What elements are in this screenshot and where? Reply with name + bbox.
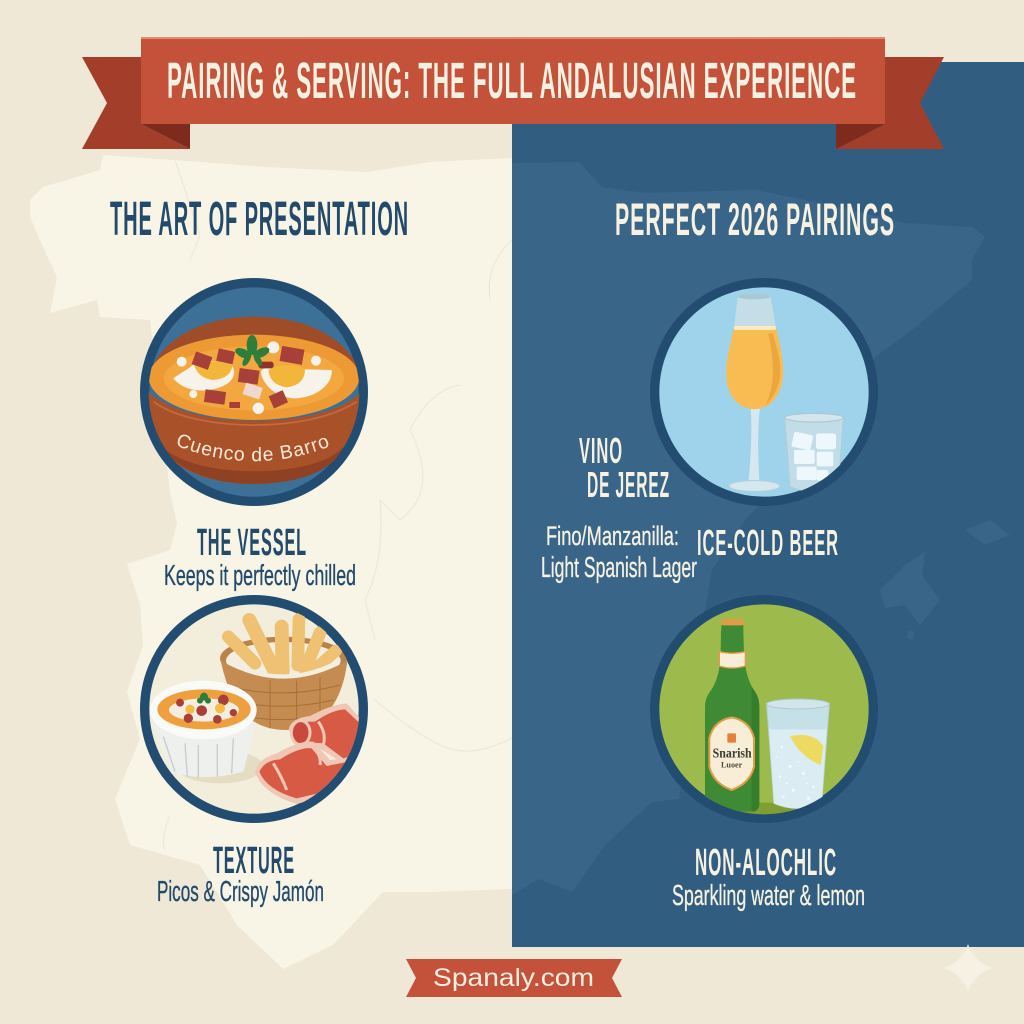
- right map of Spain: [512, 162, 985, 895]
- blue pairings panel: [512, 62, 1024, 947]
- text: vino de jerez: [579, 430, 670, 505]
- caption: fino and lager: [541, 521, 697, 584]
- glass stem and foot: [749, 407, 760, 480]
- text: non-alcoholic: NON-ALOCHLIC: [695, 842, 837, 884]
- second line: Light Spanish Lager: [541, 552, 697, 584]
- illustration: sherry glass and iced tumbler: [655, 283, 873, 501]
- green bottle: [705, 625, 759, 812]
- bowl label text: Cuenco de Barro: [178, 434, 328, 462]
- sparkling water glass: [767, 703, 829, 808]
- left boiled egg: [173, 361, 234, 390]
- basket back: [220, 636, 346, 665]
- bubbles: [776, 745, 815, 800]
- ramekin toppings: [169, 698, 239, 722]
- bowl front: [147, 390, 363, 484]
- illustration: lager bottle and sparkling water: Luoer: [721, 760, 743, 769]
- text: texture: TEXTURE: [213, 840, 295, 882]
- text: the vessel: THE VESSEL: [197, 522, 307, 564]
- wicker basket front: [268, 658, 341, 678]
- text: the vessel: [164, 522, 356, 592]
- soup surface: [149, 335, 359, 420]
- illustration: lager bottle and sparkling water: [655, 600, 873, 818]
- infographic canvas: DE JEREZ: [587, 464, 670, 505]
- right boiled egg: [261, 368, 332, 398]
- sherry liquid: [726, 327, 783, 409]
- illustration: clay bowl of salmorejo: [140, 278, 368, 506]
- illustration: picos, ramekin and jamon: [145, 600, 363, 818]
- left map of Spain: [30, 155, 512, 969]
- table shadow: [734, 802, 798, 814]
- ham cubes: [192, 346, 304, 409]
- bread sticks: [228, 619, 336, 672]
- caption: fino and lager: Fino/Manzanilla:: [546, 521, 679, 551]
- shadow: [182, 754, 261, 784]
- right ribbon tail: [836, 57, 944, 149]
- caption: non-alcoholic: Sparkling water & lemon: [672, 880, 865, 912]
- bottle label text: Snarish: [713, 746, 752, 761]
- neck label: [719, 652, 745, 668]
- caption: texture: Picos & Crispy Jamón: [157, 876, 324, 908]
- infographic canvas: THE ART OF PRESENTATION: [110, 193, 409, 246]
- main bottle label: [709, 717, 754, 790]
- sherry glass upper bowl: [734, 297, 776, 328]
- infographic canvas: ICE-COLD BEER: [697, 522, 839, 563]
- islands: [880, 520, 1010, 640]
- jamon slices: [289, 703, 363, 763]
- title banner: [82, 37, 944, 149]
- crumbled egg white: [177, 341, 321, 414]
- ice cubes: [791, 431, 836, 481]
- lemon slice: [790, 735, 823, 765]
- caption: the vessel: Keeps it perfectly chilled: [164, 560, 356, 592]
- text: texture: [157, 840, 324, 908]
- icon: sparkle star: [944, 944, 992, 992]
- website text: Spanaly.com: [433, 964, 594, 992]
- parsley garnish: [235, 335, 270, 366]
- left ribbon tail: [82, 57, 190, 149]
- text: non-alcoholic: [672, 842, 865, 912]
- ramekin: [152, 723, 256, 777]
- tumbler: [785, 417, 843, 492]
- banner body: [141, 37, 885, 124]
- text: vino de jerez: VINO: [579, 430, 623, 471]
- bowl back rim: [147, 317, 363, 383]
- footer ribbon: [406, 959, 622, 997]
